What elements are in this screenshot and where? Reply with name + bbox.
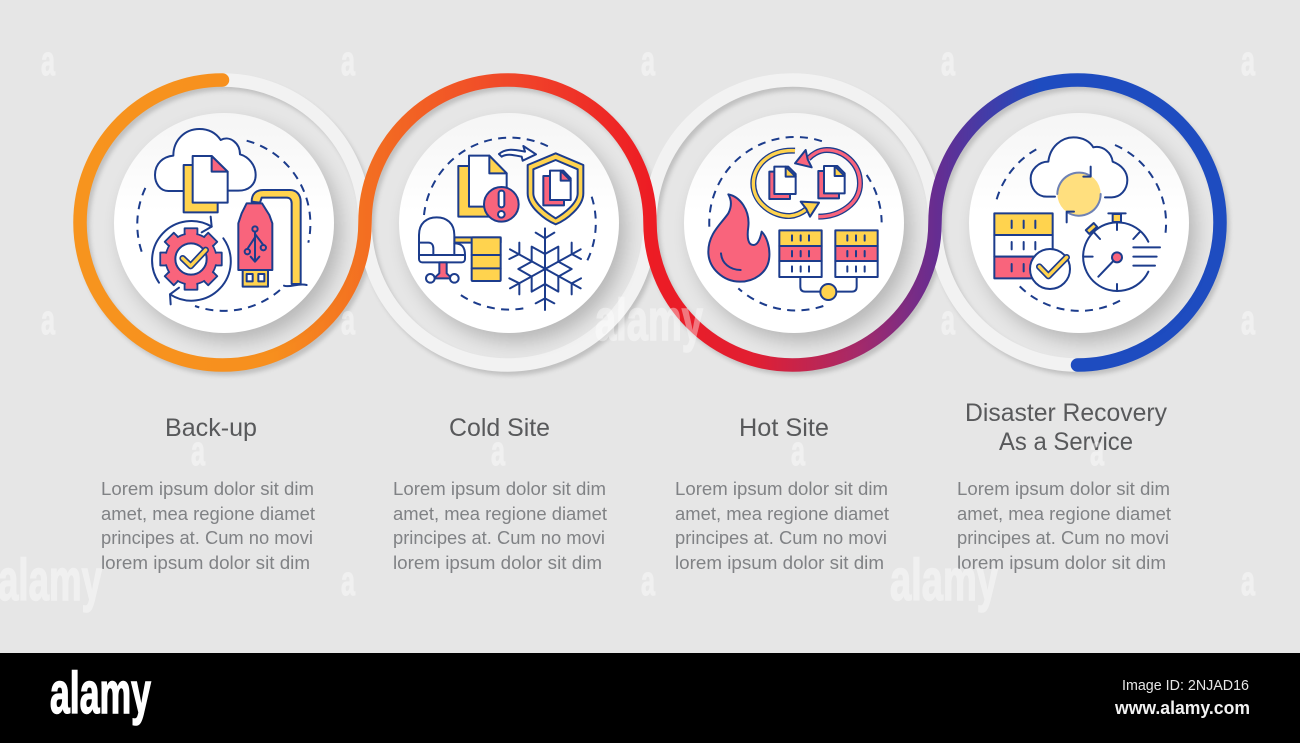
text block: back-up description: lorem ipsum dolor sit dim xyxy=(101,553,310,573)
text block: back-up description xyxy=(101,479,315,573)
text block: hot site description xyxy=(675,479,889,573)
watermarks: a xyxy=(1241,296,1255,343)
text block: back-up description: amet, mea regione diamet xyxy=(101,504,315,524)
heading: back-up: Back-up xyxy=(165,414,257,442)
text block: cold site description: amet, mea regione diamet xyxy=(393,504,607,524)
icon: back-up xyxy=(137,129,310,311)
watermarks: a xyxy=(641,37,655,84)
panel: cold site icon disc xyxy=(399,113,619,333)
icon: hot site xyxy=(708,137,882,310)
text block: disaster recovery description: Lorem ipsum dolor sit dim xyxy=(957,479,1170,499)
heading: disaster recovery as a service xyxy=(965,399,1167,456)
watermarks: a xyxy=(191,427,205,474)
panel: hot site icon disc xyxy=(684,113,904,333)
footer bar xyxy=(0,653,1300,743)
icon: cold site xyxy=(419,138,596,310)
text block: back-up description: Lorem ipsum dolor sit dim xyxy=(101,479,314,499)
watermarks: a xyxy=(641,557,655,604)
heading: cold site: Cold Site xyxy=(449,414,550,442)
heading: hot site: Hot Site xyxy=(739,414,829,442)
heading: disaster recovery as a service: As a Service xyxy=(999,428,1133,456)
watermarks: alamy xyxy=(890,548,998,613)
text block: cold site description: lorem ipsum dolor sit dim xyxy=(393,553,602,573)
heading: disaster recovery as a service: Disaster Recovery xyxy=(965,399,1167,427)
watermarks: a xyxy=(341,296,355,343)
watermarks xyxy=(0,37,1255,613)
text block: cold site description: Lorem ipsum dolor sit dim xyxy=(393,479,606,499)
text block: disaster recovery description: principes at. Cum no movi xyxy=(957,528,1169,548)
text block: hot site description: Lorem ipsum dolor sit dim xyxy=(675,479,888,499)
watermarks: alamy xyxy=(595,288,703,353)
watermarks: a xyxy=(341,37,355,84)
text block: cold site description xyxy=(393,479,607,573)
watermarks: a xyxy=(1241,557,1255,604)
watermarks: a xyxy=(41,37,55,84)
text block: disaster recovery description xyxy=(957,479,1171,573)
watermarks: a xyxy=(341,557,355,604)
disc shadows xyxy=(121,122,1196,342)
ribbon shadow xyxy=(83,84,1223,369)
panel: back-up icon disc xyxy=(114,113,334,333)
text block: cold site description: principes at. Cum no movi xyxy=(393,528,605,548)
watermarks: alamy xyxy=(0,548,102,613)
light track arcs xyxy=(222,80,1078,365)
watermarks: a xyxy=(1090,427,1104,474)
watermarks: a xyxy=(791,427,805,474)
text block: hot site description: amet, mea regione diamet xyxy=(675,504,889,524)
watermarks: a xyxy=(41,296,55,343)
text block: hot site description: lorem ipsum dolor sit dim xyxy=(675,553,884,573)
icon: disaster recovery as a service xyxy=(994,137,1166,311)
footer url: www.alamy.com xyxy=(1114,697,1250,718)
footer logo: alamy xyxy=(50,661,151,726)
watermarks: a xyxy=(941,296,955,343)
gradient ribbon xyxy=(80,80,1220,365)
text block: disaster recovery description: lorem ipsum dolor sit dim xyxy=(957,553,1166,573)
text block: disaster recovery description: amet, mea regione diamet xyxy=(957,504,1171,524)
watermarks: a xyxy=(941,37,955,84)
footer image id: Image ID: 2NJAD16 xyxy=(1122,677,1249,694)
panel: disaster recovery icon disc xyxy=(969,113,1189,333)
watermarks: a xyxy=(1241,37,1255,84)
watermarks: a xyxy=(491,427,505,474)
text block: hot site description: principes at. Cum no movi xyxy=(675,528,887,548)
text block: back-up description: principes at. Cum no movi xyxy=(101,528,313,548)
